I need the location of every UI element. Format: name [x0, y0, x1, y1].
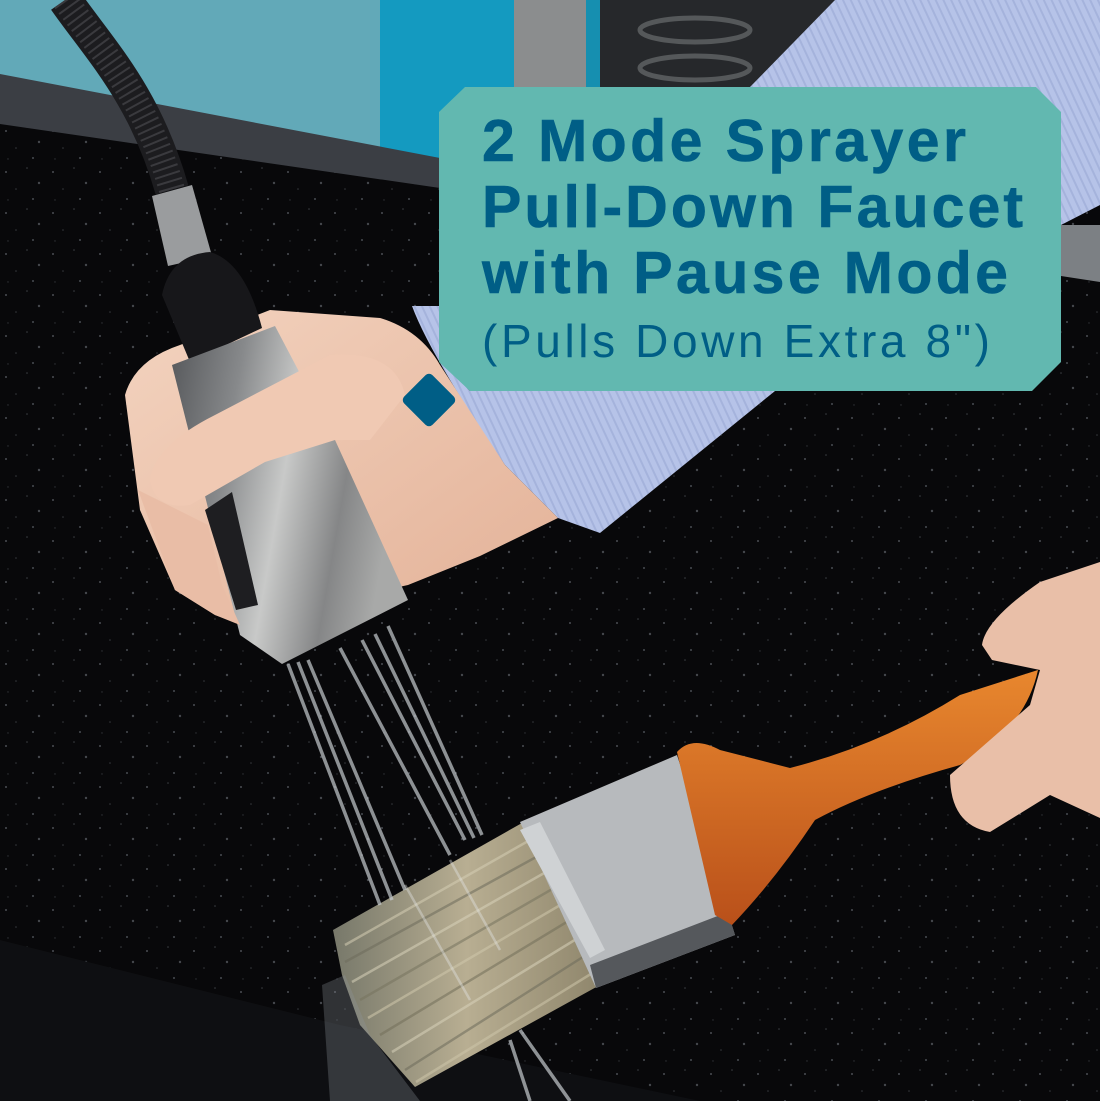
brush bristle strands	[345, 840, 594, 1082]
sprayer button	[205, 492, 258, 610]
ferrule crease	[520, 822, 605, 958]
holding hand	[125, 310, 558, 625]
ferrule dark band	[590, 912, 735, 988]
heading: 2 Mode Sprayer	[482, 108, 966, 174]
heading: Pull-Down Faucet	[482, 174, 1023, 240]
background wall and window	[0, 0, 840, 170]
heading: with Pause Mode	[481, 240, 1008, 306]
paint brush	[333, 670, 1038, 1087]
sink rim	[0, 74, 440, 188]
water streams	[288, 626, 570, 1101]
water splash	[322, 975, 420, 1101]
right sink rim	[1061, 225, 1100, 282]
diamond marker	[401, 372, 457, 428]
wrapped fingers	[138, 490, 240, 625]
sprayer head	[162, 252, 408, 664]
hose collar	[152, 185, 212, 266]
subheading: (Pulls Down Extra 8")	[482, 315, 990, 367]
right hand	[950, 562, 1100, 832]
sweater sleeve	[412, 0, 1100, 533]
heading	[481, 108, 1023, 306]
water on bristles	[405, 860, 500, 1000]
thumb	[150, 354, 405, 506]
hose	[65, 0, 172, 190]
callout panel	[439, 87, 1061, 391]
